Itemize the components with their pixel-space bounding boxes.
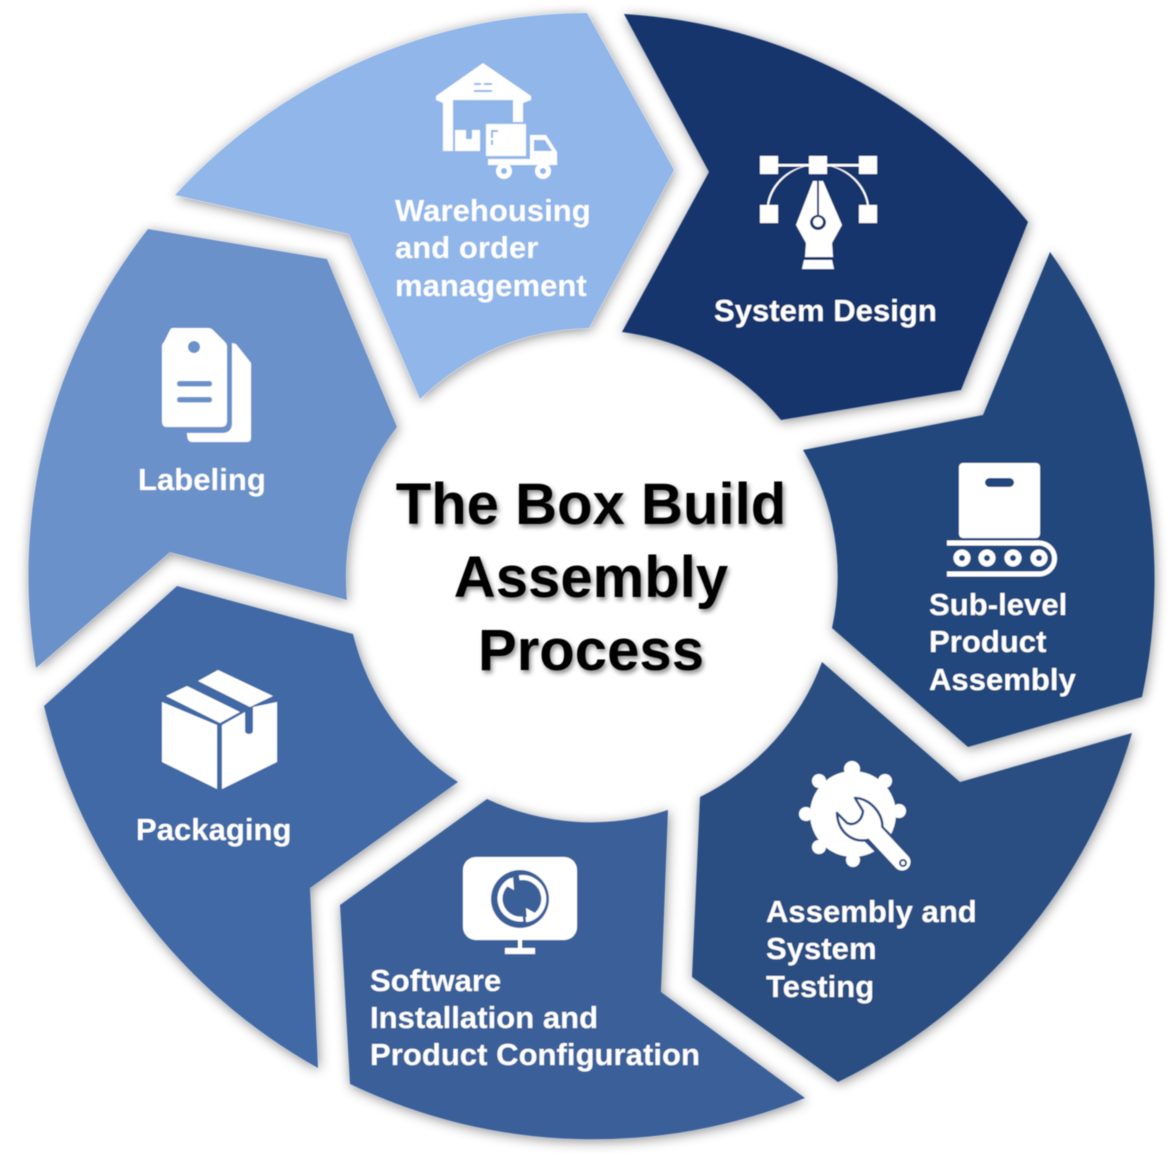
icon: conveyor belt with box — [947, 463, 1054, 574]
icon: monitor with sync arrows — [463, 857, 577, 954]
panel: Software Installation and Product Configuration — [340, 799, 805, 1139]
icon: gear and wrench — [799, 761, 906, 867]
panel: Assembly and System Testing — [692, 662, 1132, 1082]
title: Process — [478, 618, 704, 683]
icon: warehouse and truck — [436, 63, 557, 179]
label: Assembly: Assembly — [929, 662, 1077, 697]
label: management: management — [395, 268, 587, 303]
label: Product: Product — [929, 624, 1046, 659]
panel: System Design — [622, 14, 1028, 420]
panel: Warehousing and order management — [175, 13, 674, 399]
icon: stacked tags — [162, 328, 251, 442]
label: Assembly and: Assembly and — [766, 894, 977, 929]
label: Labeling: Labeling — [138, 462, 266, 497]
title — [396, 472, 786, 683]
label: Testing: Testing — [766, 969, 874, 1004]
icon: pen tool — [760, 156, 877, 269]
label: Packaging: Packaging — [136, 812, 292, 847]
label: Software: Software — [370, 963, 501, 998]
panel: Labeling — [28, 229, 397, 668]
label: Product Configuration: Product Configuration — [370, 1037, 700, 1072]
label: System: System — [766, 931, 877, 966]
label: System Design: System Design — [714, 293, 937, 328]
label: Warehousing: Warehousing — [395, 193, 591, 228]
label: Installation and: Installation and — [370, 1000, 598, 1035]
title: The Box Build — [396, 472, 786, 537]
icon: cardboard box — [162, 670, 277, 789]
label: and order: and order — [395, 230, 538, 265]
label: Sub-level: Sub-level — [929, 587, 1067, 622]
panel: Sub-level Product Assembly — [803, 252, 1155, 747]
title: Assembly — [454, 545, 728, 610]
panel: Packaging — [44, 586, 458, 1068]
